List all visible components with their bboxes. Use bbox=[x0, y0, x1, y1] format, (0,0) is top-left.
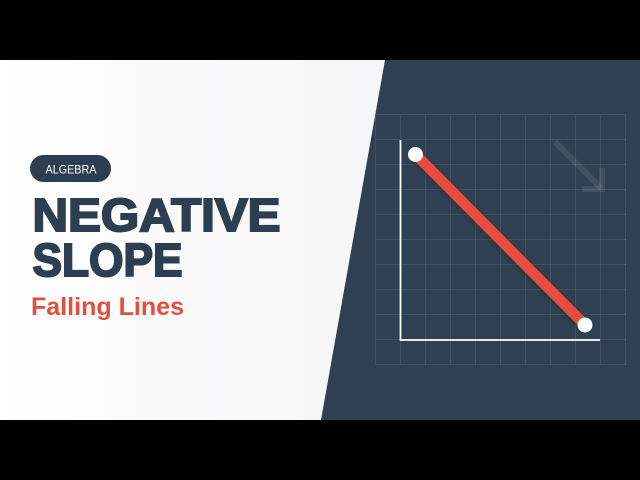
panel: light left background bbox=[0, 60, 400, 420]
start point bbox=[408, 147, 423, 162]
line shadow bbox=[416, 157, 586, 327]
end point bbox=[578, 318, 592, 332]
icon: faint down-right arrow bbox=[555, 142, 602, 189]
badge: algebra bbox=[30, 155, 111, 182]
subtitle: falling lines: Falling Lines bbox=[31, 293, 184, 321]
heading: negative slope: SLOPE bbox=[32, 234, 182, 286]
falling red line bbox=[416, 155, 585, 325]
chart: falling line graph bbox=[376, 114, 626, 365]
heading: negative slope: NEGATIVE bbox=[32, 189, 280, 241]
heading: negative slope bbox=[32, 189, 280, 286]
chart axes bbox=[400, 140, 600, 340]
badge: algebra: ALGEBRA bbox=[46, 162, 96, 176]
panel: dark right background bbox=[321, 60, 640, 420]
